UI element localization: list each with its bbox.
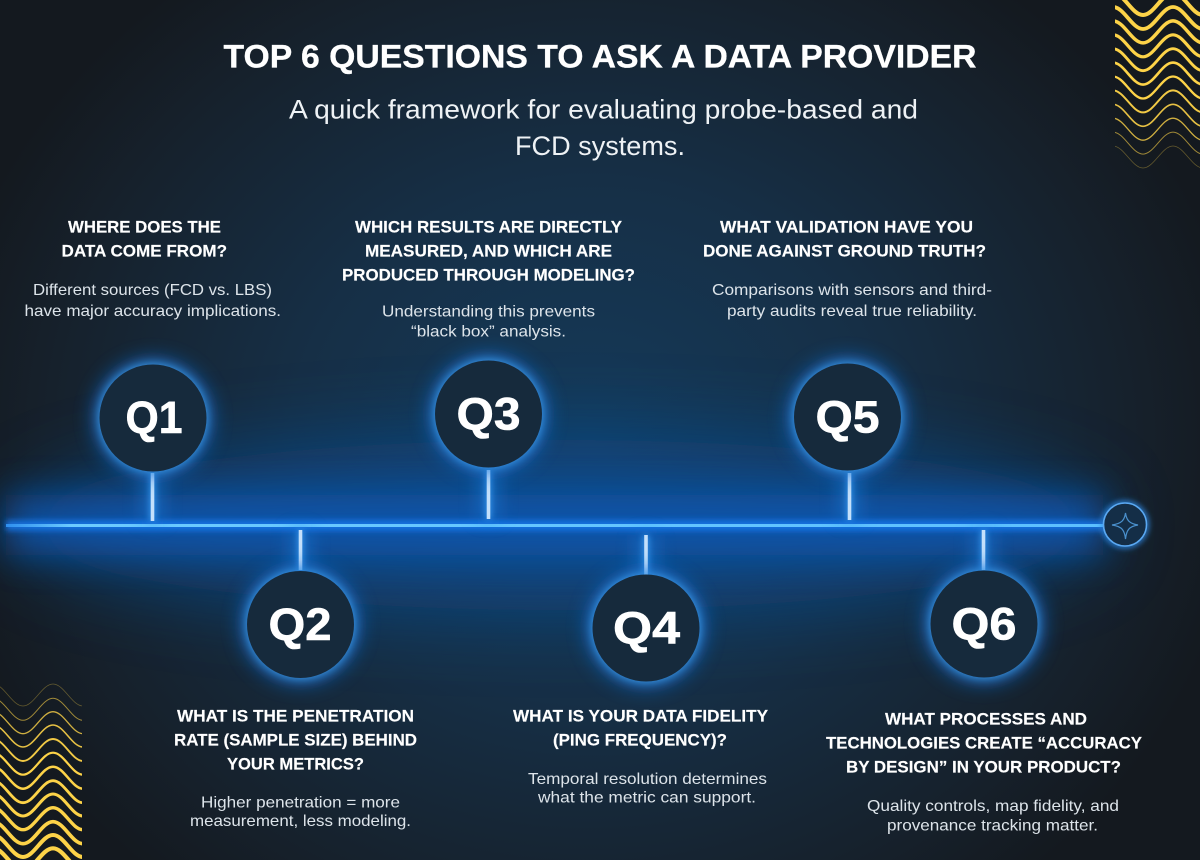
Q1 description: [24, 282, 281, 320]
Q5 description: [712, 282, 992, 320]
Q6 panel: [826, 530, 1142, 835]
Q6 description: Quality controls, map fidelity, and: [867, 798, 1119, 815]
Q3 heading: PRODUCED THROUGH MODELING?: [342, 267, 635, 285]
Q3 connector: [478, 470, 499, 519]
Q2 connector: [290, 530, 311, 570]
Q1 panel: [24, 219, 281, 521]
Q3 badge: Q3: [456, 388, 520, 440]
Q1 description: Different sources (FCD vs. LBS): [33, 282, 272, 299]
Q5 panel: [703, 219, 992, 520]
Q4 connector: [636, 535, 656, 575]
Q6 description: [867, 798, 1119, 835]
Q2 description: Higher penetration = more: [201, 794, 400, 811]
Q6 description: provenance tracking matter.: [887, 818, 1098, 835]
Q1 heading: DATA COME FROM?: [62, 243, 227, 261]
Q4 panel: [513, 535, 768, 807]
icon: timeline end star: [1104, 503, 1146, 546]
Q4 badge: Q4: [613, 602, 680, 654]
Q4 heading: (PING FREQUENCY)?: [553, 732, 727, 750]
Q2 panel: [174, 530, 417, 830]
Q4 description: Temporal resolution determines: [528, 771, 767, 788]
Q3 description: “black box” analysis.: [411, 324, 566, 341]
Q6 heading: WHAT PROCESSES AND: [885, 710, 1087, 728]
Q5 badge: Q5: [816, 392, 880, 442]
Q6 badge: [925, 565, 1043, 683]
Q3 panel: [342, 219, 635, 519]
Q1 badge: Q1: [126, 392, 182, 443]
Q1 connector: [142, 473, 163, 521]
Q2 heading: [174, 708, 417, 774]
timeline: [6, 440, 1103, 610]
Q5 badge: [788, 358, 906, 476]
Q3 description: Understanding this prevents: [382, 304, 595, 321]
Q2 heading: RATE (SAMPLE SIZE) BEHIND: [174, 732, 417, 750]
decorative waves: top right: [1113, 0, 1200, 168]
title: TOP 6 QUESTIONS TO ASK A DATA PROVIDER: [224, 38, 976, 74]
Q6 heading: BY DESIGN” IN YOUR PRODUCT?: [846, 758, 1121, 776]
Q3 badge: [430, 355, 548, 473]
Q6 badge: Q6: [952, 598, 1016, 650]
Q3 description: [382, 304, 595, 341]
Q5 description: Comparisons with sensors and third-: [712, 282, 992, 299]
Q2 heading: WHAT IS THE PENETRATION: [177, 708, 414, 726]
Q2 description: measurement, less modeling.: [190, 813, 411, 830]
Q1 description: have major accuracy implications.: [24, 303, 281, 320]
subtitle: FCD systems.: [515, 131, 685, 161]
Q6 heading: TECHNOLOGIES CREATE “ACCURACY: [826, 734, 1142, 752]
subtitle: [289, 94, 918, 161]
Q2 description: [190, 794, 411, 830]
Q4 heading: [513, 708, 768, 750]
Q2 badge: Q2: [268, 599, 332, 650]
Q1 heading: WHERE DOES THE: [68, 219, 221, 237]
Q2 heading: YOUR METRICS?: [227, 756, 364, 774]
decorative waves: bottom left: [0, 684, 83, 860]
Q3 heading: [342, 219, 635, 285]
Q5 heading: DONE AGAINST GROUND TRUTH?: [703, 243, 986, 261]
Q1 heading: [62, 219, 227, 261]
Q6 heading: [826, 710, 1142, 776]
Q4 heading: WHAT IS YOUR DATA FIDELITY: [513, 708, 768, 726]
Q4 description: what the metric can support.: [537, 790, 756, 807]
subtitle: A quick framework for evaluating probe-based and: [289, 94, 918, 124]
Q2 badge: [242, 566, 360, 684]
Q4 description: [528, 771, 767, 807]
Q6 connector: [973, 530, 994, 570]
Q1 badge: [94, 359, 212, 477]
Q4 badge: [587, 569, 705, 687]
Q5 heading: [703, 219, 986, 261]
Q5 description: party audits reveal true reliability.: [727, 303, 977, 320]
Q5 connector: [839, 473, 860, 520]
Q3 heading: WHICH RESULTS ARE DIRECTLY: [355, 219, 622, 237]
Q5 heading: WHAT VALIDATION HAVE YOU: [720, 219, 973, 237]
Q3 heading: MEASURED, AND WHICH ARE: [365, 243, 612, 261]
